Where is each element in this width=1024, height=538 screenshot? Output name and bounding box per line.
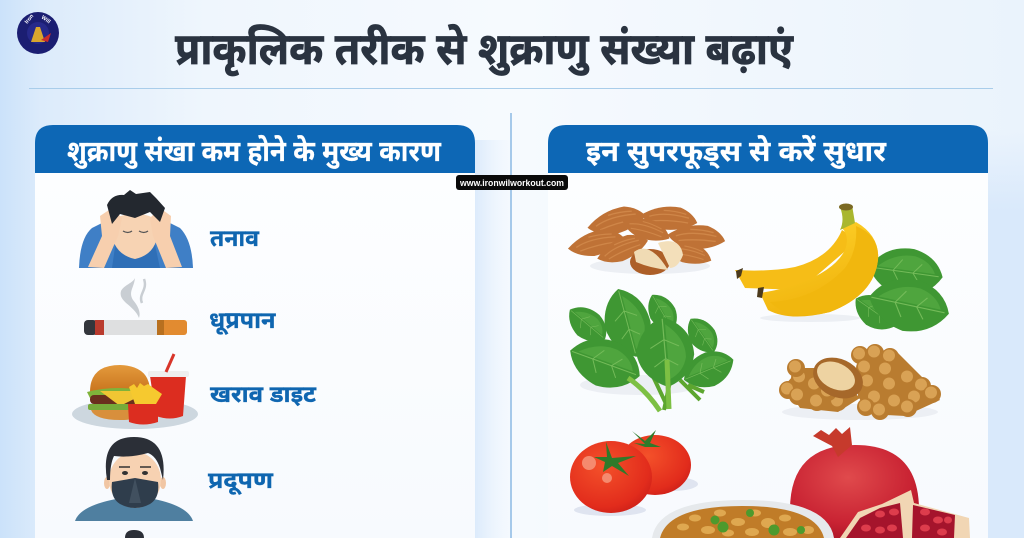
food: bowl of lentils bbox=[652, 500, 834, 538]
logo badge: Iron bbox=[24, 13, 36, 25]
icon: cigarette bbox=[84, 278, 187, 335]
food: walnuts bbox=[779, 344, 941, 420]
icon: stressed man bbox=[79, 190, 193, 268]
icon: man wearing pollution mask bbox=[75, 437, 193, 521]
label: stress: तनाव bbox=[210, 225, 260, 251]
food: tomatoes bbox=[570, 430, 698, 516]
icon: next item, partly cut off bbox=[125, 530, 144, 538]
panel: superfoods bbox=[548, 125, 988, 538]
panel heading: causes bbox=[35, 125, 475, 173]
logo badge bbox=[17, 12, 59, 54]
panel heading: superfoods: इन सुपरफूड्स से करें सुधार bbox=[586, 134, 887, 169]
website badge bbox=[456, 175, 568, 190]
food: spinach bbox=[560, 283, 740, 411]
food: almonds bbox=[566, 201, 727, 275]
icon: fast food bbox=[72, 354, 198, 429]
food: spinach behind banana bbox=[847, 243, 954, 340]
website badge: www.ironwilworkout.com bbox=[459, 178, 564, 189]
title divider bbox=[29, 88, 993, 89]
title: प्राकृलिक तरीक से शुक्राणु संख्या बढ़ाएं bbox=[175, 23, 794, 76]
panel heading: causes: शुक्राणु संखा कम होने के मुख्य कारण bbox=[67, 134, 442, 169]
label: bad diet: खराव डाइट bbox=[210, 381, 317, 407]
label: smoking: धूप्रपान bbox=[209, 307, 276, 335]
column divider bbox=[510, 113, 512, 538]
food: pomegranate bbox=[790, 427, 970, 538]
label: pollution: प्रदूपण bbox=[208, 467, 274, 495]
logo badge: Will bbox=[40, 15, 52, 25]
panel: causes bbox=[35, 125, 475, 538]
panel heading: superfoods bbox=[548, 125, 988, 173]
food: bananas bbox=[735, 204, 878, 322]
